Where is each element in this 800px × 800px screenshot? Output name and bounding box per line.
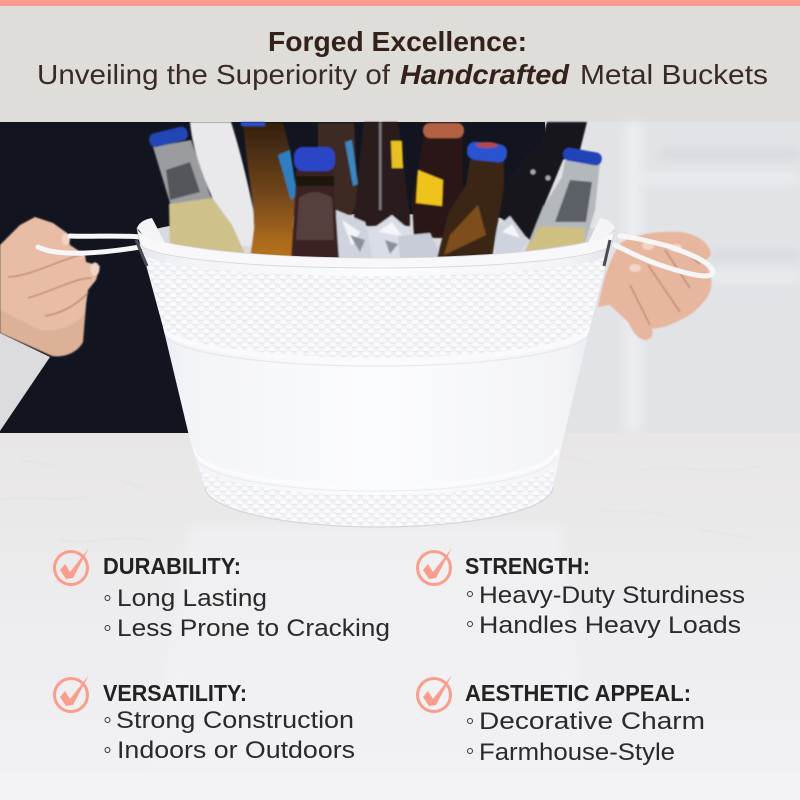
bottle: dark right [497,122,587,240]
bottle: front centre [291,147,339,259]
dimple bands and ridges [143,252,609,527]
bottle: dark centre with yellow label [354,122,410,226]
heading: VERSATILITY: [103,680,247,706]
feature: versatility [54,675,355,764]
heading: AESTHETIC APPEAL: [465,680,691,706]
bottle: clear left [148,125,244,258]
bullet list [105,707,355,764]
subtitle [37,59,768,90]
feature: durability [54,548,390,642]
wall and door [0,122,800,434]
bottle: dark back with blue label [318,123,358,215]
icon: check [54,675,89,712]
feature: strength [418,548,745,639]
icon: check [418,675,452,712]
dark clothing [0,122,545,434]
bullet list: Handles Heavy Loads [479,612,741,639]
bottle: clear right [525,147,603,252]
bullet list: Decorative Charm [479,708,705,735]
rim [137,228,615,268]
bullet list: Strong Construction [116,707,354,734]
photo: bucket of bottles [0,121,800,542]
bullet list [105,585,390,642]
heading: DURABILITY: [103,553,241,579]
left hand and arm [0,217,100,356]
left handle [38,236,140,253]
feature: aesthetic appeal [418,675,705,766]
bullet list: Indoors or Outdoors [117,737,355,764]
header panel [0,6,800,122]
bucket body [136,218,615,527]
icon: check [418,548,452,584]
top accent bar [0,0,800,6]
bullet list: Less Prone to Cracking [117,615,390,642]
marble table [0,433,800,800]
subtitle: Handcrafted [400,59,570,90]
right handle [615,236,713,276]
bullet list: Farmhouse-Style [479,739,675,766]
handle brackets [136,240,610,266]
title: Forged Excellence: [268,26,527,57]
bullet list [468,582,745,639]
bottle: brown cap with yellow label [412,123,464,238]
subtitle: Unveiling the Superiority of [37,59,390,90]
right hand [598,232,711,340]
heading: STRENGTH: [465,553,590,579]
handles [38,236,713,276]
bottle: amber with blue label [241,122,297,260]
bullet list: Long Lasting [117,585,267,612]
bucket back rim [138,214,614,262]
bullet list [468,708,705,766]
bottle: white [190,122,258,246]
ice cubes [336,210,608,258]
subtitle: Metal Buckets [580,59,768,90]
icon: check [54,548,89,584]
bottles and ice [148,122,608,260]
bottle: front angled [437,141,508,258]
bullet list: Heavy-Duty Sturdiness [479,582,745,609]
